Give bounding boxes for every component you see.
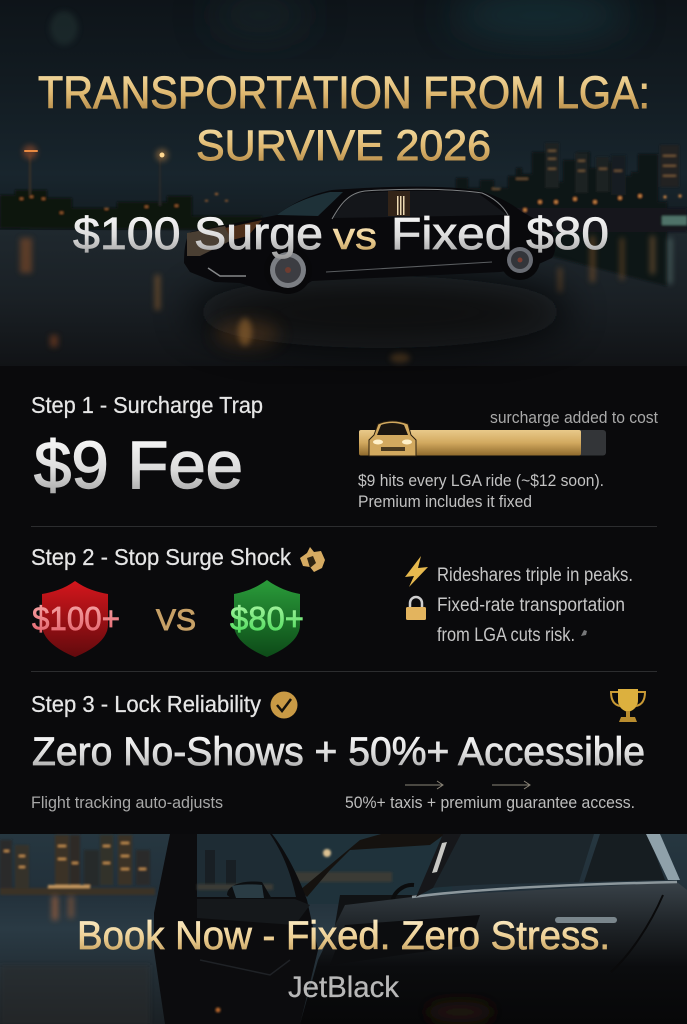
- city skyline: [456, 143, 687, 286]
- hero panel: night airport scene: [0, 0, 687, 366]
- icon: gold car: [369, 421, 416, 456]
- call to action: Book Now - Fixed. Zero Stress.: [77, 914, 610, 958]
- car body with rear door: [300, 834, 687, 1024]
- limousine: [184, 187, 555, 294]
- wet ground reflections: [20, 236, 672, 347]
- windshield gap and interior: [272, 834, 452, 925]
- text: surcharge explanation: Premium includes it fixed: [358, 492, 532, 511]
- title: TRANSPORTATION FROM LGA:: [38, 67, 650, 118]
- car shadow and puddles: [190, 276, 570, 363]
- title: SURVIVE 2026: [196, 122, 491, 170]
- text: surge risk notes: from LGA cuts risk.: [437, 625, 575, 646]
- icon: gold check badge: [270, 692, 298, 718]
- icon: small diamond mark: [581, 630, 587, 636]
- big number: $9 fee: $9 Fee: [34, 428, 243, 503]
- arrow: [492, 781, 530, 789]
- heading: step 2: Step 2 - Stop Surge Shock: [31, 544, 291, 570]
- subtitle: surge vs fixed: Fixed $80: [391, 208, 609, 259]
- text: flight tracking: Flight tracking auto-adjusts: [31, 793, 223, 812]
- panel: step 1 surcharge trap: [31, 392, 658, 511]
- subtitle: surge vs fixed: vs: [333, 216, 377, 258]
- text: surge risk notes: Fixed-rate transportation: [437, 595, 625, 616]
- icon: gold burst: [300, 547, 325, 572]
- arrow: [405, 781, 443, 789]
- title: [38, 67, 650, 170]
- text: access guarantee: 50%+ taxis + premium guarantee access.: [345, 793, 635, 812]
- footer panel: open car door scene: [0, 834, 687, 1024]
- background city: [0, 835, 155, 895]
- bar label: surcharge added to cost: [490, 408, 658, 427]
- headline: zero no-shows: Zero No-Shows + 50%+ Accessible: [32, 730, 645, 774]
- brand: JetBlack: JetBlack: [288, 971, 400, 1004]
- panel: step 3 lock reliability: [31, 689, 645, 812]
- subtitle: surge vs fixed: $100 Surge: [73, 208, 323, 259]
- shield: green $80+: $80+: [230, 600, 304, 637]
- left terminal buildings and lamps: [0, 155, 262, 230]
- shield: green $80+: [230, 580, 304, 657]
- text: surge risk notes: Rideshares triple in peaks.: [437, 565, 633, 586]
- vs label: VS: [156, 604, 196, 637]
- icon: lightning bolt: [405, 556, 428, 587]
- icon: trophy: [611, 689, 645, 722]
- shield: red $100+: [32, 581, 120, 657]
- text: surcharge explanation: $9 hits every LGA ride (~$12 soon).: [358, 471, 604, 490]
- heading: step 1: Step 1 - Surcharge Trap: [31, 392, 263, 418]
- surcharge progress bar: [359, 430, 606, 456]
- heading: step 3: Step 3 - Lock Reliability: [31, 691, 261, 717]
- shield: red $100+: $100+: [32, 600, 120, 637]
- text: surge risk notes: [437, 565, 633, 646]
- icon: padlock: [406, 597, 426, 620]
- subtitle: surge vs fixed: [73, 208, 609, 259]
- door frame and inner door: [154, 834, 318, 1024]
- panel: step 2 stop surge shock: [31, 544, 633, 657]
- text: surcharge explanation: [358, 471, 604, 511]
